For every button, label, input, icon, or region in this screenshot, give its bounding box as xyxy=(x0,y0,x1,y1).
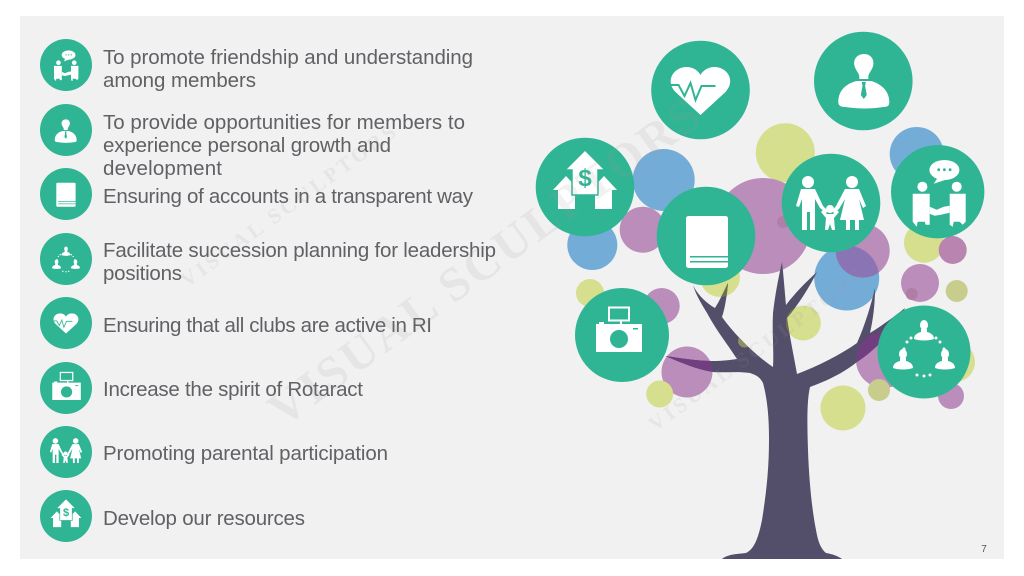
list item: succession planning: positions xyxy=(103,262,182,285)
list item: resources xyxy=(40,490,305,542)
page number: 7 xyxy=(981,544,987,555)
icon circle: money house arrows: $ xyxy=(578,165,592,192)
tree foliage bubbles xyxy=(567,123,975,430)
list item: personal growth: experience personal growth and xyxy=(103,134,391,157)
list item: active clubs xyxy=(40,297,432,349)
watermark text xyxy=(176,88,868,437)
icon circle: book xyxy=(657,187,755,285)
icon circle: handshake xyxy=(891,145,984,238)
list item: parental participation: Promoting parental participation xyxy=(103,442,388,465)
icon circle: person xyxy=(814,32,913,130)
list item: friendship: To promote friendship and understanding xyxy=(103,46,473,69)
list item: resources: Develop our resources xyxy=(103,507,305,530)
icon circle: heart xyxy=(651,41,750,139)
icon circle: network of people xyxy=(878,306,970,398)
list item: friendship xyxy=(40,39,473,92)
list item: accounts: Ensuring of accounts in a transparent way xyxy=(103,185,474,208)
icon circle: family xyxy=(782,154,880,252)
icon circle: money house arrows xyxy=(536,138,634,236)
list item: resources: $ xyxy=(63,507,69,519)
list item: personal growth: To provide opportunities for members to xyxy=(103,111,465,134)
tree trunk and branches xyxy=(662,257,912,559)
list item: spirit of Rotaract xyxy=(40,362,363,414)
list item: friendship: among members xyxy=(103,69,256,92)
watermark text: VISUAL SCULPTORS xyxy=(258,88,710,437)
list item: active clubs: Ensuring that all clubs are active in RI xyxy=(103,314,432,337)
list item: personal growth: development xyxy=(103,157,222,180)
list item: parental participation xyxy=(40,426,388,478)
list item: accounts xyxy=(40,168,474,220)
list item: succession planning xyxy=(40,233,496,285)
list item: succession planning: Facilitate succession planning for leadership xyxy=(103,239,496,262)
watermark text: VISUAL SCULPTORS xyxy=(644,264,868,436)
list item: personal growth xyxy=(40,104,465,180)
list item: spirit of Rotaract: Increase the spirit of Rotaract xyxy=(103,378,363,401)
watermark text: VISUAL SCULPTORS xyxy=(176,120,400,292)
icon circle: camera xyxy=(575,288,669,382)
